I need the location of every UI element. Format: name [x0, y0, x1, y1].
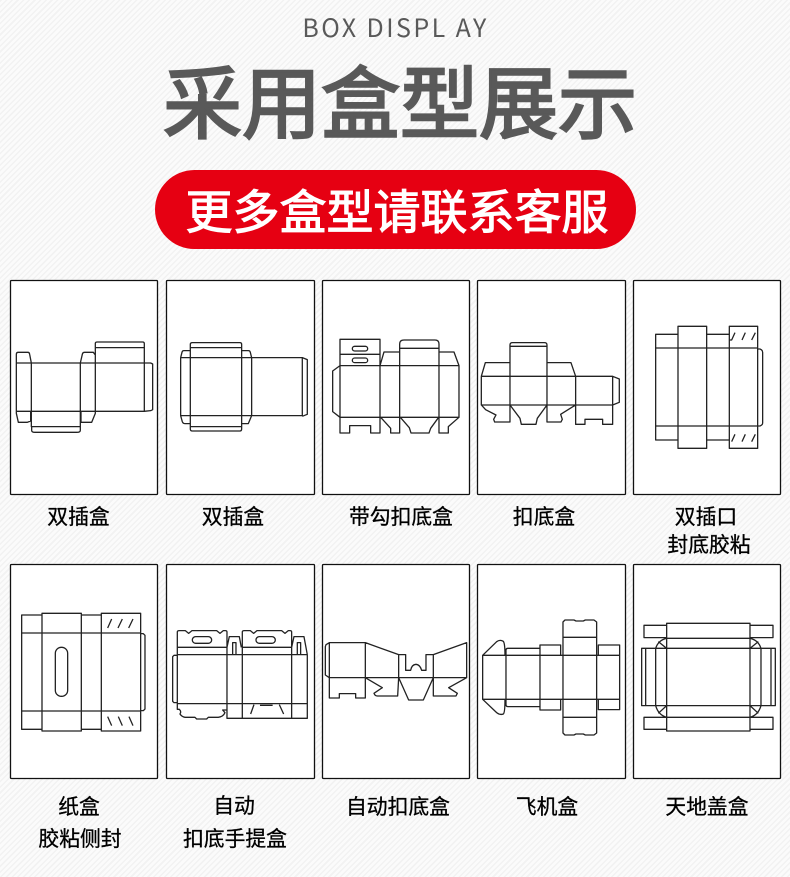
panel: double tuck glued bottom box — [634, 280, 780, 494]
label: double tuck glued bottom box: 封底胶粘 — [667, 534, 751, 557]
title: 采用盒型展示 — [163, 40, 637, 155]
diagram: airplane box — [483, 620, 620, 735]
diagram: paper box with window — [22, 613, 145, 731]
label: paper box side glued: 胶粘侧封 — [38, 828, 122, 851]
label: double tuck box 1: 双插盒 — [47, 506, 110, 529]
panel: double tuck box 2 — [166, 280, 314, 494]
diagram: double tuck box 2 — [181, 343, 307, 431]
label: auto bottom handle box: 扣底手提盒 — [183, 828, 287, 851]
diagram: lid and base box — [642, 623, 775, 731]
label: paper box side glued — [38, 796, 122, 851]
panel: bottom-lock box — [478, 280, 626, 494]
diagram: double tuck glued bottom box — [656, 326, 763, 448]
label: auto bottom handle box — [183, 795, 287, 851]
label: bottom-lock box: 扣底盒 — [513, 506, 575, 529]
label: paper box side glued: 纸盒 — [58, 796, 100, 819]
label: auto bottom-lock box: 自动扣底盒 — [346, 796, 450, 819]
panel: lid and base box — [634, 564, 780, 778]
diagram: double tuck box 1 — [16, 342, 153, 432]
diagram: hook bottom-lock box — [333, 339, 459, 433]
panel: airplane box — [478, 564, 626, 778]
label: double tuck glued bottom box: 双插口 — [675, 506, 737, 529]
panel: double tuck box 1 — [10, 280, 158, 494]
diagram: auto bottom-lock box — [325, 643, 467, 700]
callout: red pill banner: 更多盒型请联系客服 — [186, 174, 608, 243]
panel: auto bottom-lock box — [322, 564, 470, 778]
panel: auto bottom handle box — [166, 564, 314, 778]
label: airplane box: 飞机盒 — [516, 796, 578, 819]
panel: paper box side glued — [10, 564, 158, 778]
panel: hook bottom-lock box — [322, 280, 470, 494]
subtitle: BOX DISPLAY: BOX DISPL AY — [302, 9, 489, 45]
label: double tuck box 2: 双插盒 — [202, 506, 264, 529]
label: hook bottom-lock box: 带勾扣底盒 — [349, 506, 453, 529]
diagram: auto bottom handle box — [173, 631, 307, 719]
diagram: bottom-lock box — [481, 343, 619, 424]
label: auto bottom handle box: 自动 — [213, 795, 255, 818]
label: lid and base box: 天地盖盒 — [665, 796, 749, 819]
label: double tuck glued bottom box — [667, 506, 751, 557]
